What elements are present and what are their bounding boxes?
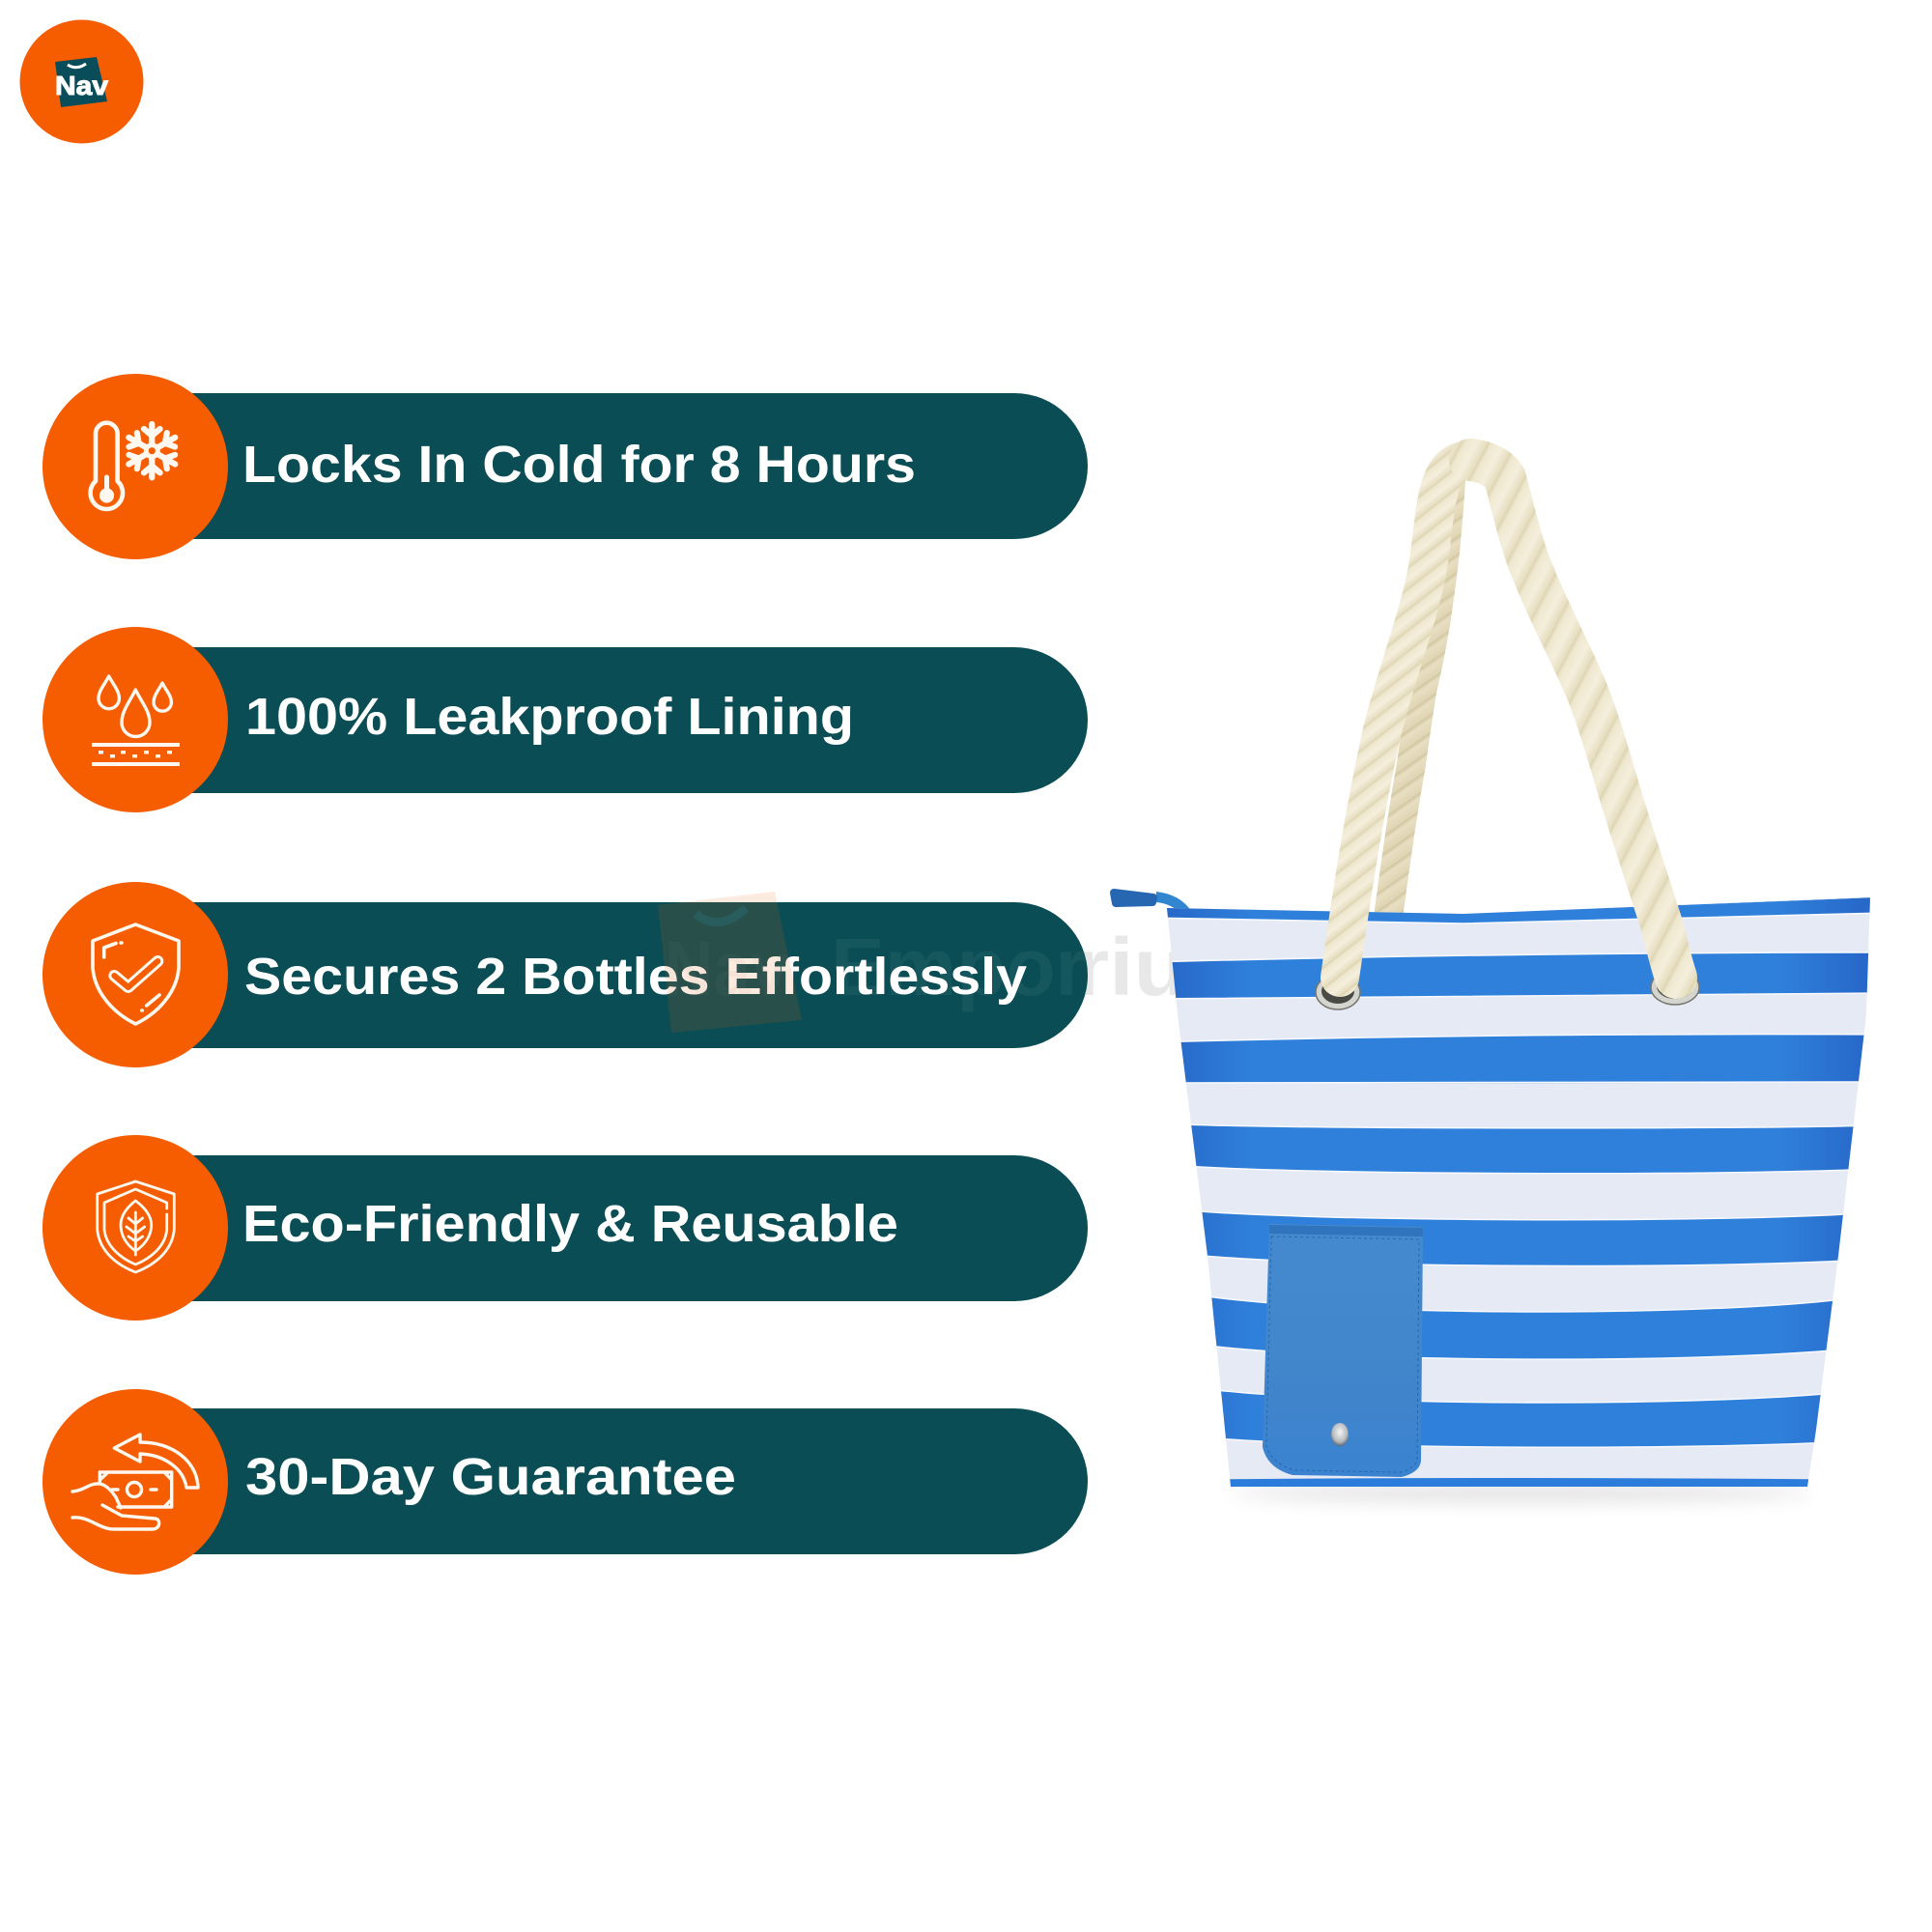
- circle badge with shield check icon: [43, 882, 228, 1067]
- bag shadow: [1232, 1486, 1811, 1501]
- front pocket flap: [1263, 1224, 1423, 1477]
- circle badge with money-back hand icon: [43, 1389, 228, 1575]
- pill: [116, 393, 1088, 539]
- zipper pull: [1114, 892, 1191, 916]
- pill: [116, 902, 1088, 1048]
- watermark: Nav Emporium overlay: Nav: [665, 925, 788, 1011]
- label: Secures 2 Bottles Effortlessly: [244, 948, 1027, 1006]
- circle badge with water drops icon: [43, 627, 228, 812]
- watermark: Emporium lettering behind the pills: Emporium: [831, 922, 1265, 1012]
- feature row: cold for 8 hours: [43, 374, 1088, 559]
- label: Eco-Friendly & Reusable: [242, 1195, 898, 1253]
- feature row: leakproof lining: [43, 627, 1088, 812]
- pill: [116, 1408, 1088, 1554]
- label: Locks In Cold for 8 Hours: [242, 436, 916, 494]
- feature row: eco-friendly: [43, 1135, 1088, 1321]
- label: 100% Leakproof Lining: [245, 688, 854, 746]
- pill: [116, 647, 1088, 793]
- feature row: secures bottles: [43, 882, 1088, 1067]
- logo: Nav badge: [19, 19, 143, 143]
- product: striped tote bag: [1114, 460, 1884, 1501]
- label: 30-Day Guarantee: [245, 1448, 736, 1506]
- logo: Nav badge: Nav: [55, 71, 108, 100]
- front rope handle: [1340, 460, 1676, 978]
- feature row: 30-day guarantee: [43, 1389, 1088, 1575]
- watermark: Nav Emporium overlay: [658, 892, 1087, 1033]
- rivet: [1331, 1423, 1349, 1446]
- bag body: [1150, 889, 1884, 1497]
- grommets: [1316, 970, 1699, 1009]
- circle badge with leaf shield icon: [43, 1135, 228, 1321]
- pill: [116, 1155, 1088, 1301]
- watermark: Nav Emporium overlay: Empor: [831, 922, 1087, 1012]
- back rope handle: [1388, 469, 1452, 918]
- circle badge with thermometer and snowflake icon: [43, 374, 228, 559]
